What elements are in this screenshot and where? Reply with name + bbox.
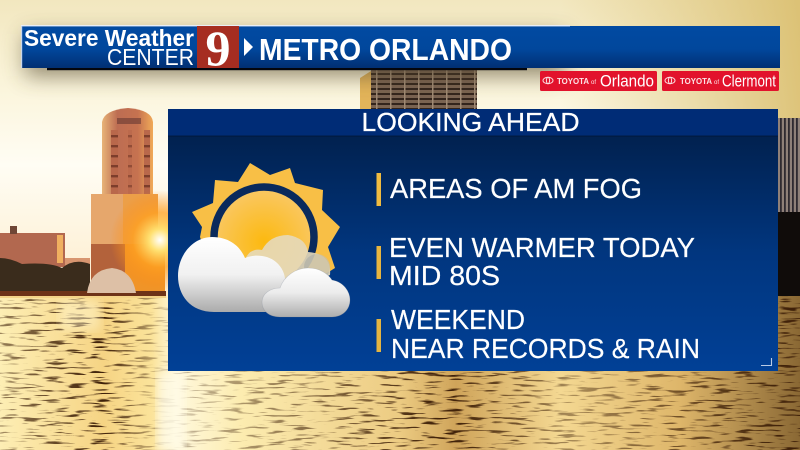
background: fountain dome	[87, 268, 136, 293]
logo: Severe Weather Center: CENTER	[107, 44, 194, 70]
sponsor badge: Toyota of Orlando: TOYOTA	[557, 77, 589, 86]
sun disc and ring	[214, 187, 314, 287]
background: center tower	[360, 70, 477, 110]
background: lake water	[0, 296, 800, 450]
background: low building on left	[0, 226, 90, 272]
panel: looking ahead	[168, 107, 778, 371]
panel heading bar	[168, 107, 778, 137]
small cloud	[262, 268, 350, 317]
sponsor badge: Toyota of Orlando: of	[591, 80, 596, 86]
text block: weekend near records and rain: NEAR RECORDS & RAIN	[391, 333, 700, 364]
logo: channel 9: 9	[206, 20, 230, 76]
background: left hotel tower	[91, 108, 165, 294]
sun rays	[192, 163, 340, 290]
arrow	[244, 38, 253, 56]
sponsor badge: Toyota of Clermont: Clermont	[722, 72, 776, 90]
text block: weekend near records and rain	[376, 304, 700, 364]
text block: even warmer today: EVEN WARMER TODAY	[389, 232, 695, 263]
background: sun flare	[110, 190, 210, 290]
text block: even warmer today	[376, 232, 695, 291]
icon: sun behind clouds	[178, 163, 350, 317]
sponsor badge: Toyota of Clermont: of	[714, 80, 719, 86]
panel heading bar: LOOKING AHEAD	[362, 107, 580, 137]
icon: toyota emblem	[665, 77, 675, 84]
corner bracket mark	[761, 358, 772, 366]
logo: channel 9	[197, 20, 239, 76]
text block: areas of am fog: AREAS OF AM FOG	[390, 173, 642, 204]
location title: METRO ORLANDO	[259, 33, 512, 67]
large cloud	[178, 237, 285, 312]
text block: weekend near records and rain: WEEKEND	[391, 304, 525, 335]
banner drop shadow	[25, 34, 565, 76]
sponsor badge: Toyota of Orlando: Orlando	[600, 72, 654, 90]
text block: even warmer today: MID 80S	[389, 260, 500, 291]
top banner	[21, 20, 780, 76]
background: right building and trees	[778, 118, 800, 296]
background: shoreline trees	[0, 258, 166, 296]
sponsor badge: Toyota of Clermont: TOYOTA	[680, 77, 712, 86]
background: sunrise sky	[0, 0, 800, 300]
icon: toyota emblem	[543, 77, 553, 84]
logo: Severe Weather Center	[24, 25, 194, 70]
sponsor badge: Toyota of Orlando	[540, 71, 657, 91]
translucent back cloud	[243, 235, 330, 290]
logo: Severe Weather Center: Severe Weather	[24, 25, 194, 51]
sponsor badge: Toyota of Clermont	[662, 71, 779, 91]
